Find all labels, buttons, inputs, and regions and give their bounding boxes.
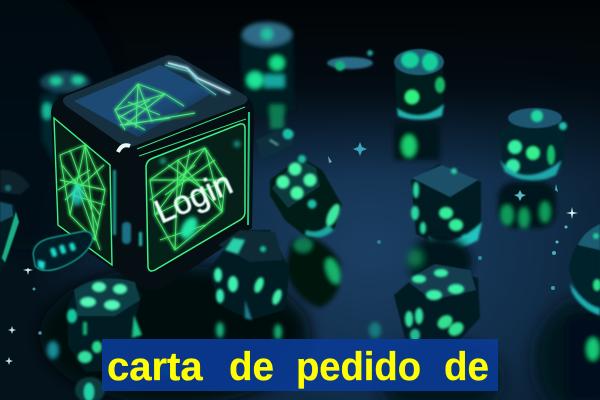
blurred die: top centre bbox=[240, 22, 294, 129]
cube body bbox=[51, 55, 254, 291]
title text: carta bbox=[107, 345, 203, 389]
sparkle stars bbox=[5, 142, 578, 365]
die: four pips, right of cube bbox=[270, 155, 343, 240]
reflection: right die bbox=[498, 182, 556, 228]
title banner bbox=[102, 339, 498, 391]
die: left edge bbox=[0, 200, 19, 268]
login text: Login bbox=[149, 164, 238, 230]
small die: above four pip bbox=[256, 127, 296, 160]
reflection: four pip die bbox=[285, 238, 343, 308]
die: bottom left, four pips bbox=[67, 278, 142, 372]
reflection: far right die bbox=[566, 316, 600, 400]
cube side column bbox=[113, 170, 142, 246]
die: right, tumbling bbox=[500, 108, 567, 184]
pooled glow under cube bbox=[47, 322, 381, 376]
cube top face bbox=[63, 55, 248, 147]
left panel glow bbox=[71, 184, 83, 206]
blurred small die: top middle bbox=[327, 50, 373, 71]
main login cube bbox=[51, 55, 254, 291]
die: under cube bbox=[208, 230, 290, 320]
title text: de bbox=[444, 345, 489, 389]
stone: left edge bbox=[0, 170, 30, 195]
reflection: centre right die bbox=[408, 236, 472, 288]
die: centre right bbox=[411, 164, 482, 251]
die: top right, one pip bbox=[394, 49, 445, 120]
title text: pedido bbox=[296, 345, 421, 389]
reflection: top right die bbox=[394, 122, 440, 160]
cube edge lights bbox=[118, 107, 249, 225]
right panel glow bbox=[160, 141, 240, 242]
left panel network bbox=[58, 145, 105, 250]
cube right panel bbox=[146, 124, 245, 271]
blurred die: left behind cube bbox=[40, 71, 90, 165]
cube top circuit lines bbox=[115, 63, 230, 130]
reflection: bottom left die bbox=[75, 377, 105, 400]
die: lower centre bbox=[394, 264, 480, 350]
title text: de bbox=[229, 345, 274, 389]
cube left panel bbox=[54, 118, 112, 265]
die: far right edge bbox=[569, 224, 600, 316]
right panel network bbox=[150, 148, 225, 250]
coin die: left of cube bbox=[33, 231, 93, 271]
